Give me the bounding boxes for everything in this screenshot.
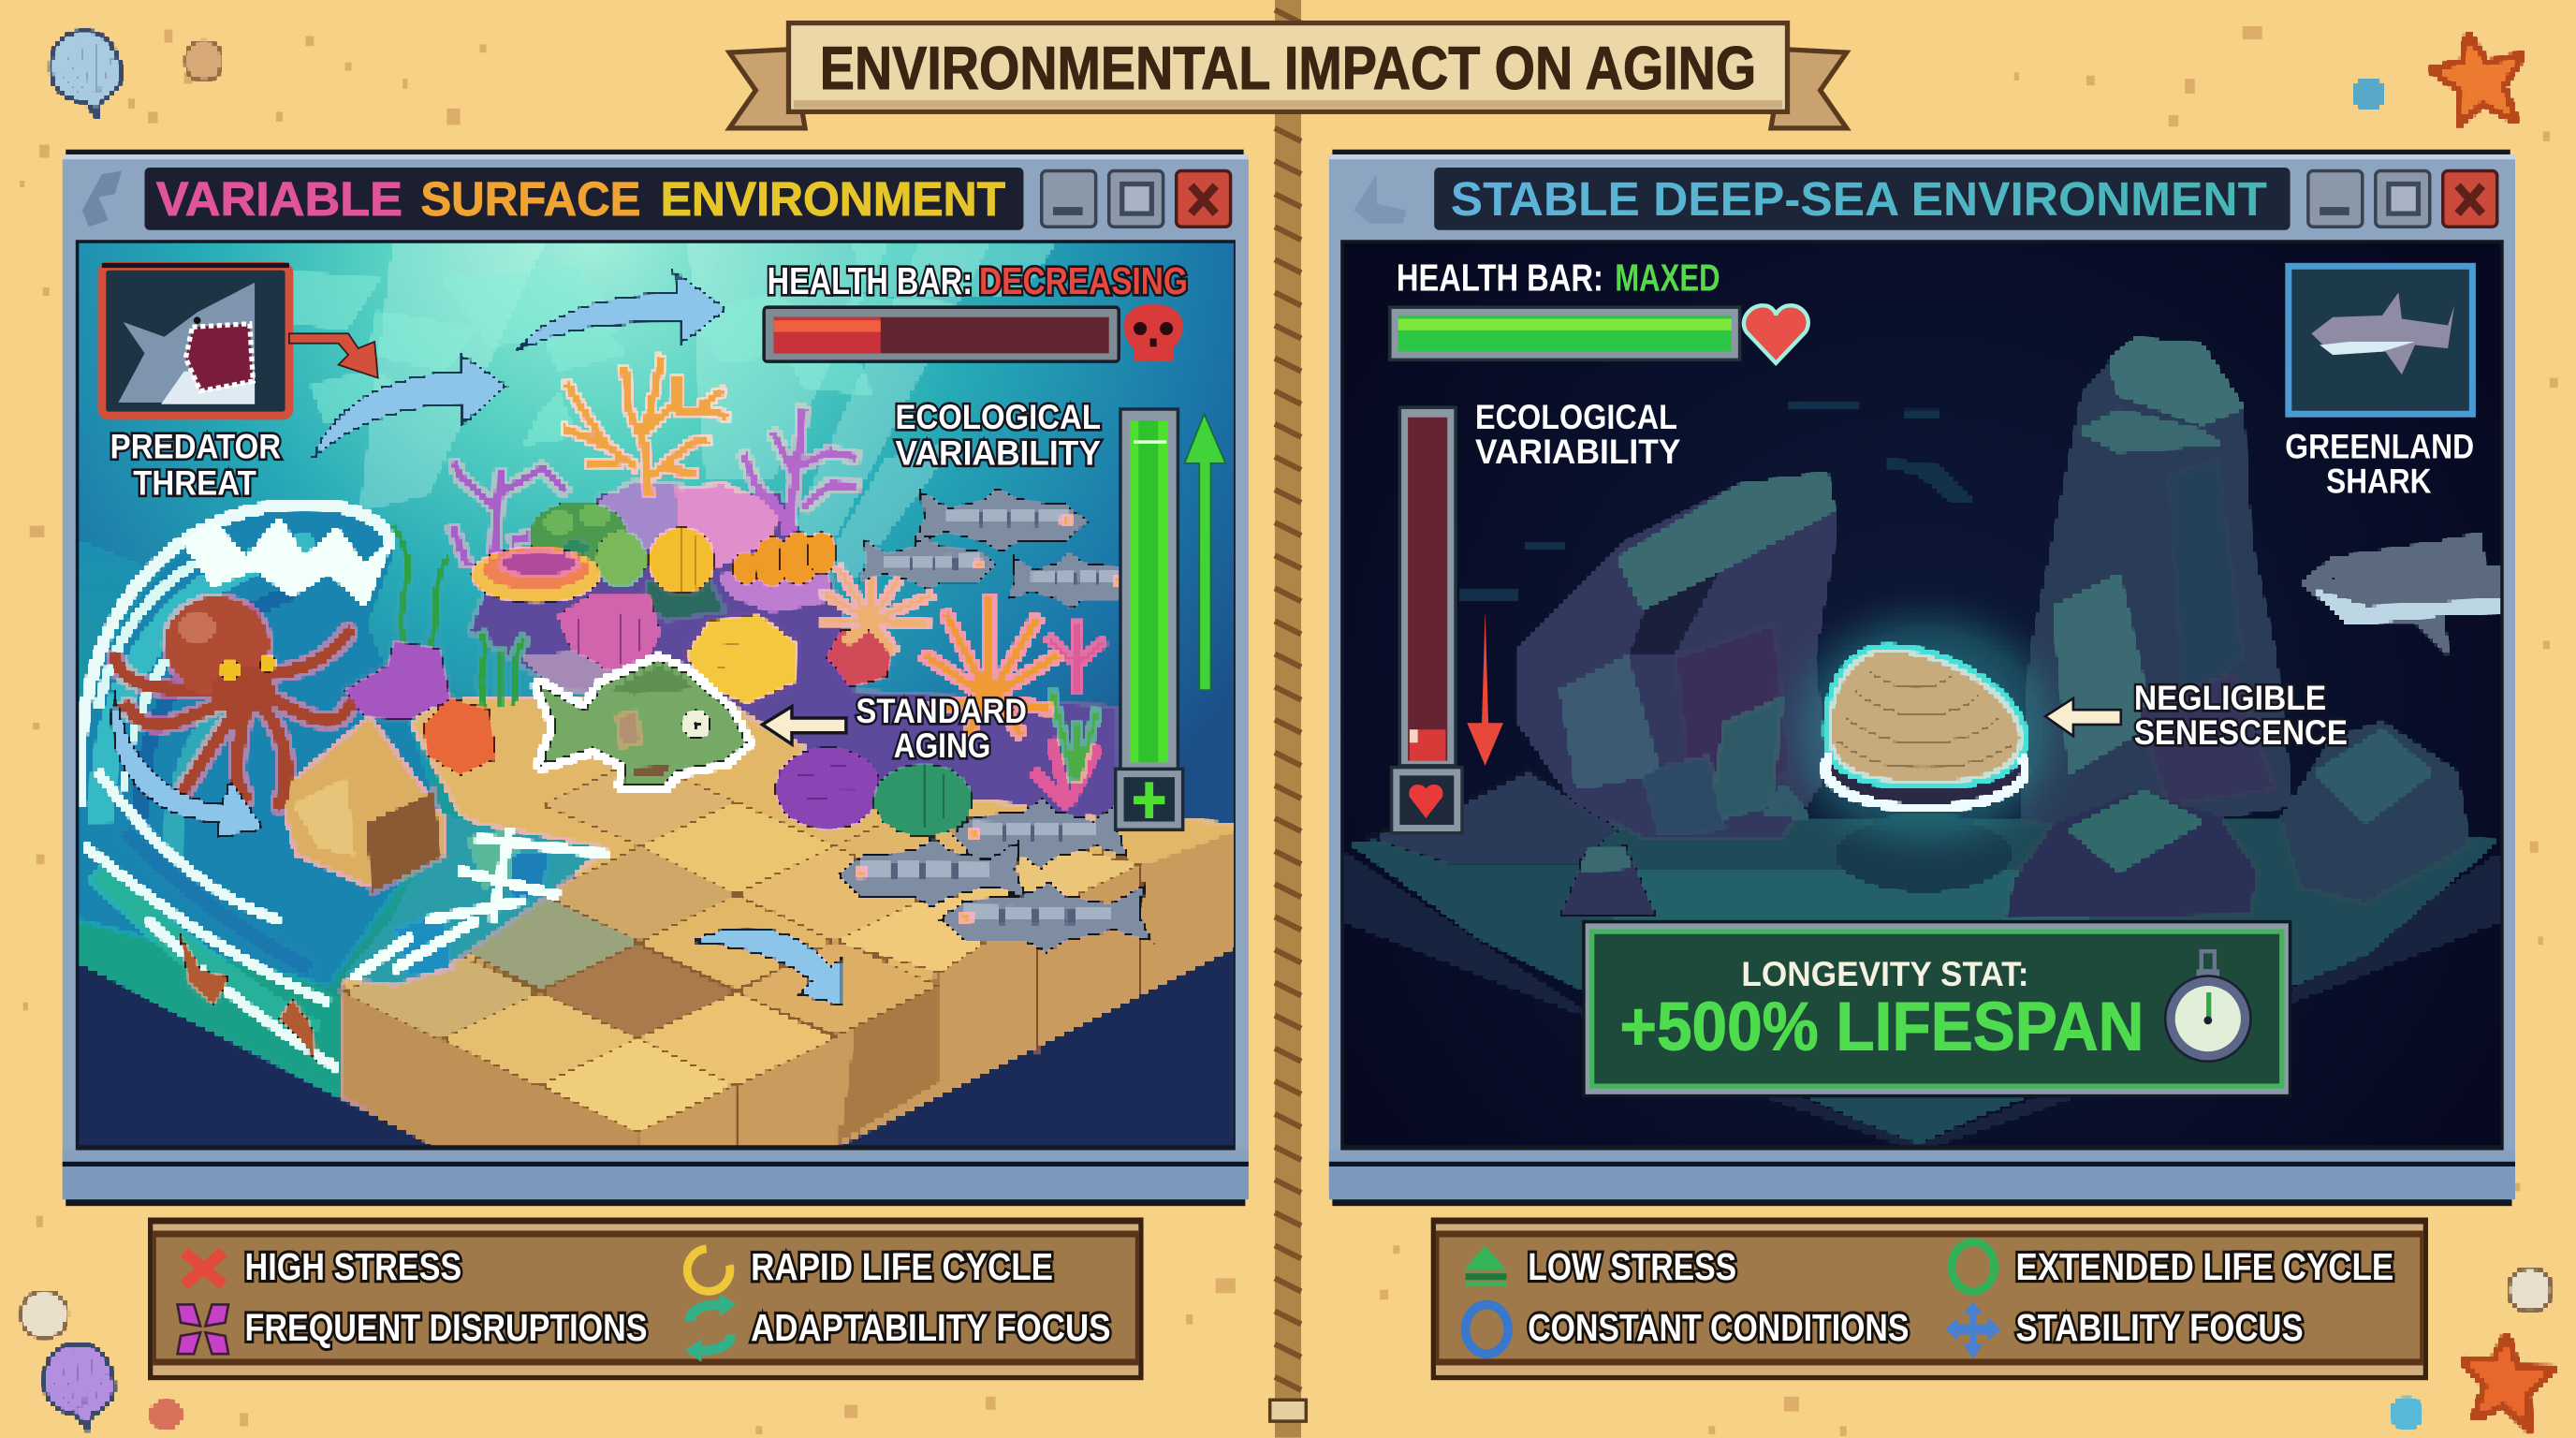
label predator threat: PREDATOR bbox=[110, 428, 281, 466]
purple coral left bbox=[452, 460, 567, 566]
foam and pool bbox=[345, 816, 607, 986]
table coral bbox=[472, 547, 600, 603]
label standard aging: STANDARD bbox=[856, 692, 1027, 730]
wood board bbox=[148, 1217, 1144, 1380]
icon: shark bbox=[2311, 292, 2454, 374]
label predator threat: THREAT bbox=[133, 463, 256, 502]
white shell right bbox=[2510, 1270, 2550, 1310]
icon: constant conditions bbox=[1466, 1304, 1508, 1354]
arrow to fish bbox=[762, 707, 846, 744]
text: FREQUENT DISRUPTIONS bbox=[245, 1306, 648, 1349]
text: CONSTANT CONDITIONS bbox=[1528, 1306, 1909, 1349]
anemone bbox=[822, 555, 933, 687]
label greenland shark: GREENLAND bbox=[2285, 428, 2474, 466]
purple mound bbox=[601, 479, 681, 550]
left water bbox=[79, 542, 479, 1097]
ecological variability gauge low bbox=[1392, 407, 1462, 833]
wave curl bbox=[79, 505, 444, 1068]
window title text: STABLE DEEP-SEA ENVIRONMENT bbox=[1451, 172, 2267, 226]
longevity label: LONGEVITY STAT: bbox=[1741, 955, 2029, 993]
isometric tiles bbox=[344, 759, 1140, 1132]
legend left bbox=[148, 1217, 1144, 1380]
greenland shark card bbox=[2289, 266, 2472, 414]
platform top bbox=[1354, 822, 2496, 1142]
right rock bbox=[2280, 723, 2469, 903]
window title text: SURFACE bbox=[420, 172, 641, 226]
icon: adaptability focus bbox=[685, 1293, 736, 1362]
label ecological variability bbox=[1475, 398, 1680, 471]
longevity value: +500% LIFESPAN bbox=[1620, 987, 2144, 1064]
health bar label: HEALTH BAR: bbox=[1397, 257, 1603, 300]
water patches bbox=[279, 246, 1051, 444]
platform lower bbox=[1344, 855, 2500, 1151]
health bar label: HEALTH BAR: bbox=[768, 259, 973, 302]
light rays bbox=[361, 243, 986, 575]
green clump bbox=[529, 501, 646, 587]
scene: deep sea rocks bbox=[1344, 243, 2500, 1151]
health bar label: MAXED bbox=[1615, 257, 1720, 300]
label negligible senescence: SENESCENCE bbox=[2134, 713, 2348, 752]
arrow down red bbox=[1467, 611, 1503, 766]
text: ADAPTABILITY FOCUS bbox=[751, 1306, 1110, 1349]
plus box bbox=[1116, 769, 1183, 829]
icon: title shark bbox=[1354, 174, 1406, 224]
orange lump coral bbox=[424, 698, 496, 775]
arrow on sand bbox=[694, 928, 842, 1005]
blue gem lower bbox=[2392, 1399, 2422, 1428]
wave arrow bbox=[112, 690, 263, 838]
icon: stopwatch bbox=[2165, 951, 2250, 1062]
dark teal base bbox=[644, 580, 726, 621]
ribbon right bbox=[1771, 50, 1847, 128]
plaque bbox=[788, 23, 1788, 111]
label negligible senescence bbox=[2134, 679, 2348, 752]
deep shark bbox=[2304, 534, 2500, 654]
label predator threat bbox=[110, 428, 281, 502]
purple tube coral bbox=[345, 640, 450, 720]
orange spiky coral bbox=[923, 594, 1060, 736]
longevity stat panel bbox=[1584, 922, 2291, 1096]
center rope bbox=[1270, 0, 1306, 1438]
text: STABILITY FOCUS bbox=[2015, 1306, 2304, 1349]
shell top left bbox=[46, 27, 127, 119]
label greenland shark bbox=[2285, 428, 2474, 501]
label standard aging: AGING bbox=[894, 726, 990, 765]
small rock at clam bbox=[1766, 785, 1808, 818]
ribbon left bbox=[729, 50, 805, 128]
ecological variability gauge bbox=[1116, 409, 1183, 829]
label ecological variability: VARIABILITY bbox=[1475, 433, 1680, 471]
pink coral cluster bbox=[1035, 621, 1104, 805]
window buttons bbox=[1042, 171, 1231, 227]
icon: stability focus bbox=[1945, 1301, 2001, 1358]
label greenland shark: SHARK bbox=[2326, 462, 2432, 501]
predator threat icon bbox=[102, 263, 289, 416]
icon: high stress bbox=[184, 1252, 224, 1284]
health bar maxed bbox=[1390, 307, 1740, 360]
sand block bbox=[279, 716, 444, 888]
text: LOW STRESS bbox=[1528, 1245, 1736, 1288]
icon: extended life cycle bbox=[1952, 1242, 1995, 1291]
platform side faces bbox=[344, 829, 1234, 1145]
text: RAPID LIFE CYCLE bbox=[751, 1245, 1053, 1288]
health bar label: DECREASING bbox=[979, 259, 1188, 302]
shadow under clam bbox=[1834, 814, 2014, 894]
arrow up green bbox=[1184, 414, 1225, 690]
seaweed right bbox=[1051, 690, 1097, 781]
blue gem bbox=[2354, 79, 2384, 109]
orange branching coral bbox=[562, 355, 729, 496]
tall rock pillar bbox=[2021, 339, 2291, 829]
arrow upper bbox=[513, 271, 726, 353]
starfish bottom right bbox=[2452, 1328, 2556, 1432]
reef backing bbox=[468, 493, 1117, 822]
octopus bbox=[115, 594, 348, 805]
label ecological variability: VARIABILITY bbox=[896, 434, 1101, 473]
predator arrow bbox=[289, 333, 378, 378]
starfish top right bbox=[2434, 37, 2521, 122]
arrow lower bbox=[313, 353, 506, 460]
label ecological variability: ECOLOGICAL bbox=[1475, 398, 1677, 436]
title bar bbox=[145, 168, 1023, 230]
icon: title fish bbox=[82, 171, 122, 227]
sand top surface bbox=[344, 698, 1234, 1134]
green blob bbox=[874, 764, 973, 836]
orange tube coral bbox=[733, 533, 836, 587]
legend right bbox=[1431, 1217, 2428, 1380]
label negligible senescence: NEGLIGIBLE bbox=[2134, 679, 2326, 717]
purple coral right bbox=[742, 405, 859, 534]
title banner bbox=[729, 23, 1847, 128]
barracuda school bbox=[838, 488, 1151, 952]
mid rock bbox=[2004, 788, 2259, 920]
panel: right window stable deep sea bbox=[1329, 150, 2515, 1206]
health bar decreasing bbox=[764, 307, 1119, 361]
green seaweed bbox=[391, 522, 526, 710]
title bar bbox=[1434, 168, 2291, 230]
window title text: VARIABLE bbox=[156, 172, 402, 226]
purple blob bbox=[775, 748, 881, 829]
text: EXTENDED LIFE CYCLE bbox=[2015, 1245, 2393, 1288]
water streaks bbox=[1462, 403, 1971, 600]
red pebble bbox=[152, 1401, 181, 1428]
icon: rapid life cycle bbox=[687, 1249, 730, 1291]
icon: shark bbox=[118, 283, 255, 404]
purple shell bbox=[41, 1342, 118, 1431]
window frame bbox=[1329, 150, 2515, 1206]
small front rock bbox=[1560, 846, 1656, 916]
label ecological variability: ECOLOGICAL bbox=[896, 398, 1101, 436]
label ecological variability bbox=[896, 398, 1101, 473]
icon: skull bbox=[1123, 304, 1183, 361]
icon: frequent disruptions bbox=[178, 1304, 228, 1354]
text: HIGH STRESS bbox=[245, 1245, 461, 1288]
window frame bbox=[63, 150, 1249, 1206]
pink tube coral bbox=[557, 594, 661, 670]
yellow sponge bbox=[687, 614, 797, 703]
small fish debris bbox=[178, 929, 315, 1060]
label standard aging bbox=[856, 692, 1027, 765]
white shell left bbox=[23, 1293, 66, 1336]
arrow to clam bbox=[2045, 698, 2121, 736]
heart box bbox=[1392, 768, 1462, 833]
window title text: ENVIRONMENT bbox=[661, 172, 1005, 226]
lilac platform bbox=[720, 570, 829, 611]
left rock bbox=[1519, 473, 1837, 838]
glowing clam bbox=[1764, 592, 2086, 871]
title text: ENVIRONMENTAL IMPACT ON AGING bbox=[820, 34, 1756, 102]
icon: heart bbox=[1744, 305, 1808, 363]
green fish standard aging bbox=[539, 661, 746, 785]
scene: reef and isometric sand bbox=[79, 243, 1234, 1145]
navy depths bbox=[79, 946, 1234, 1145]
panel: left window variable surface bbox=[63, 150, 1249, 1206]
pebble bbox=[187, 43, 220, 79]
low rocks left bbox=[1370, 772, 1618, 862]
window buttons bbox=[2308, 171, 2497, 227]
pink block bbox=[677, 483, 777, 566]
wood board bbox=[1431, 1217, 2428, 1380]
yellow coral bbox=[649, 527, 714, 594]
icon: low stress bbox=[1464, 1245, 1506, 1286]
